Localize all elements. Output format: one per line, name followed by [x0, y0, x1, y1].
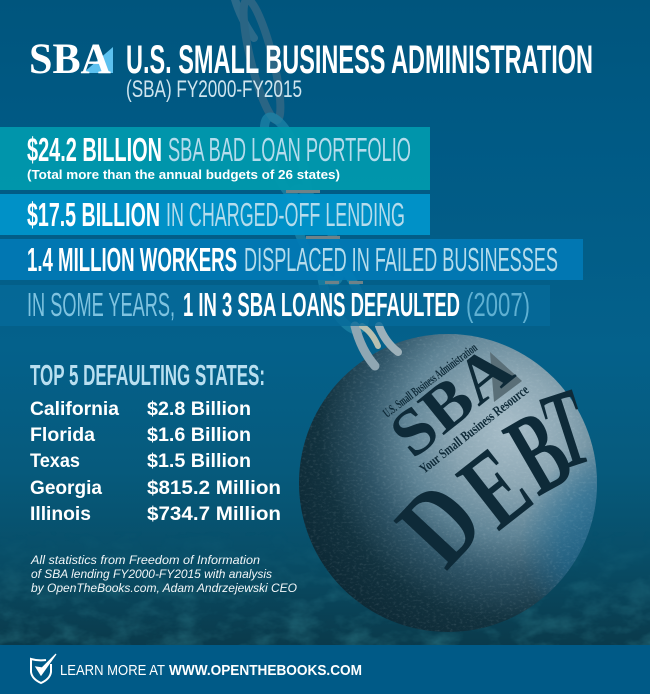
title [126, 38, 593, 103]
ball lettering: T [530, 365, 603, 494]
ball lettering: E [438, 424, 552, 551]
ball lettering: D [374, 459, 507, 589]
footer link text: WWW.OPENTHEBOOKS.COM [169, 662, 362, 679]
title: (SBA) FY2000-FY2015 [126, 76, 302, 103]
table: top 5 defaulting states: Illinois [30, 504, 91, 525]
source note: by OpenTheBooks.com, Adam Andrzejewski CEO [31, 581, 297, 595]
table: top 5 defaulting states: $1.5 Billion [147, 451, 251, 472]
panel: bad loan portfolio: (Total more than the annual budgets of 26 states) [27, 167, 340, 182]
table: top 5 defaulting states: Georgia [30, 478, 102, 499]
panel: charged-off lending: IN CHARGED-OFF LENDING [166, 196, 405, 233]
table: top 5 defaulting states: California [30, 399, 119, 420]
panel: loans defaulted [0, 285, 550, 326]
panel: charged-off lending [0, 194, 430, 235]
table: top 5 defaulting states: Texas [30, 451, 80, 472]
table: top 5 defaulting states: $815.2 Million [147, 478, 281, 499]
chain shackle [355, 326, 398, 366]
panel: loans defaulted: (2007) [466, 286, 530, 323]
source note [30, 553, 297, 595]
panel: bad loan portfolio: $24.2 BILLION [27, 131, 162, 168]
chain [234, 0, 373, 336]
background [0, 175, 650, 645]
table: top 5 defaulting states [30, 399, 281, 525]
table: top 5 defaulting states: $1.6 Billion [147, 425, 251, 446]
footer [0, 645, 650, 694]
ball lettering: U.S. Small Business Administration [380, 340, 480, 420]
panel: workers displaced: 1.4 MILLION WORKERS [27, 241, 237, 278]
footer link text [60, 662, 362, 679]
ball lettering: Your Small Business Resource [417, 383, 532, 477]
table: top 5 defaulting states: $2.8 Billion [147, 399, 251, 420]
ball lettering: SBA [376, 330, 527, 472]
source note: All statistics from Freedom of Information [30, 553, 260, 567]
panel: workers displaced [0, 239, 583, 280]
wrecking ball [299, 330, 603, 632]
source note: of SBA lending FY2000-FY2015 with analysis [31, 567, 272, 581]
ball lettering: B [487, 386, 591, 520]
footer link text: LEARN MORE AT [60, 662, 165, 679]
chain glints between bars [286, 190, 363, 284]
table: top 5 defaulting states: Florida [30, 425, 95, 446]
panel: charged-off lending: $17.5 BILLION [27, 196, 160, 233]
panel: bad loan portfolio: SBA BAD LOAN PORTFOLIO [168, 131, 411, 168]
panel: bad loan portfolio [0, 127, 430, 190]
ball lettering [374, 330, 603, 589]
panel: loans defaulted: IN SOME YEARS, [27, 286, 175, 323]
icon: shield check [31, 654, 56, 683]
logo: SBA [29, 36, 111, 83]
heading: top 5 states: TOP 5 DEFAULTING STATES: [30, 360, 265, 392]
table: top 5 defaulting states: $734.7 Million [147, 504, 281, 525]
